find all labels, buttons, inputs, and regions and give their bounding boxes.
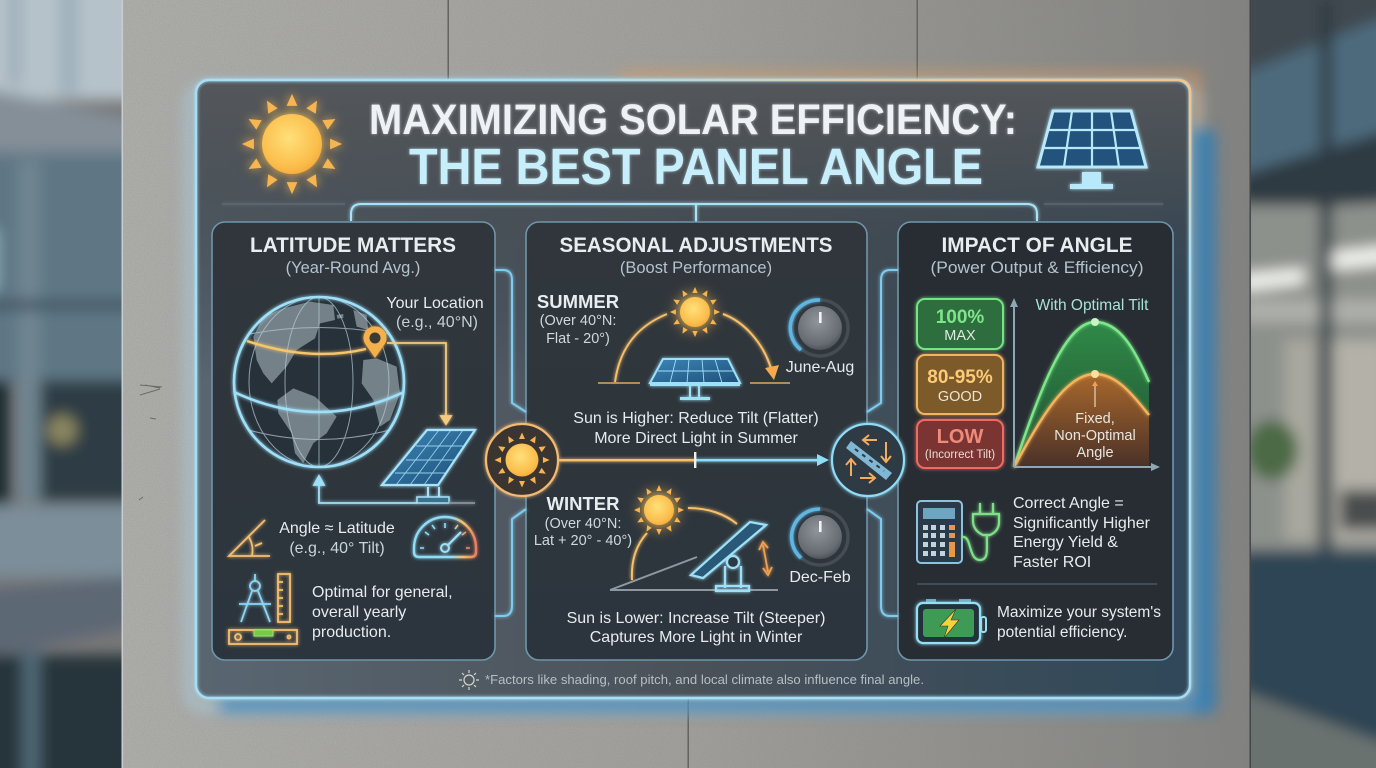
- label: fixed non-optimal angle: Angle: [1076, 445, 1114, 461]
- panel: latitude matters: [212, 222, 495, 660]
- footer note: *Factors like shading, roof pitch, and local climate also influence final angle.: [485, 672, 924, 687]
- text: optimal for general: Optimal for general,: [312, 584, 453, 601]
- connectors: side brackets: [495, 270, 898, 616]
- arrow: ground line back to globe: [314, 476, 475, 503]
- label: fixed non-optimal angle: Fixed,: [1075, 411, 1115, 427]
- icon: sun medallion: [486, 424, 558, 496]
- icon: angle: [229, 520, 270, 556]
- chart: efficiency curves: [1010, 298, 1160, 471]
- panel: seasonal adjustments: [526, 222, 867, 660]
- badge: 100% max: 100%: [936, 307, 984, 328]
- text: optimal for general: production.: [312, 624, 391, 641]
- diagram: winter sun path and tilted panel: [610, 485, 778, 591]
- title: THE BEST PANEL ANGLE: [409, 138, 983, 195]
- subheading: year-round: (Year-Round Avg.): [286, 259, 420, 277]
- icon: tilted solar panel: [382, 430, 475, 503]
- text: correct angle: [1013, 495, 1151, 571]
- text: winter explanation: Sun is Lower: Increase Tilt (Steeper): [567, 610, 825, 627]
- text: correct angle: Correct Angle =: [1013, 495, 1124, 512]
- label: summer: Flat - 20°): [546, 331, 610, 347]
- text: maximize: potential efficiency.: [997, 624, 1127, 641]
- badge: 100% max: MAX: [944, 328, 976, 344]
- icon: plug: [962, 503, 999, 560]
- label: winter: WINTER: [547, 493, 619, 514]
- title: MAXIMIZING SOLAR EFFICIENCY:: [369, 96, 1017, 144]
- text: correct angle: Energy Yield &: [1013, 534, 1118, 551]
- icon: calculator: [917, 501, 962, 563]
- label: fixed non-optimal angle: [1054, 411, 1136, 461]
- icon: compass, ruler, level: [229, 574, 297, 644]
- text: angle equals latitude: Angle ≈ Latitude: [279, 520, 395, 537]
- text: optimal for general: [312, 584, 453, 641]
- text: winter explanation: Captures More Light in Winter: [590, 629, 803, 646]
- label: winter: Lat + 20° - 40°): [534, 533, 632, 549]
- label: your location: [386, 295, 484, 331]
- text: optimal for general: overall yearly: [312, 604, 406, 621]
- background: blurred office left: [0, 0, 122, 768]
- badge: 80-95% good: GOOD: [938, 389, 982, 405]
- label: dec-feb: Dec-Feb: [789, 569, 851, 586]
- badge: low: (Incorrect Tilt): [925, 449, 995, 461]
- label: summer: [537, 291, 619, 347]
- icon: dec-feb dial: [792, 509, 848, 565]
- badge: low: [917, 420, 1003, 468]
- label: winter: [534, 493, 632, 549]
- label: your location: (e.g., 40°N): [396, 314, 478, 331]
- subheading: power output: (Power Output & Efficiency): [930, 259, 1144, 277]
- top connector: [222, 204, 1163, 222]
- subheading: boost performance: (Boost Performance): [620, 259, 772, 277]
- text: maximize: Maximize your system's: [997, 604, 1161, 621]
- text: summer explanation: Sun is Higher: Reduce Tilt (Flatter): [573, 410, 819, 427]
- arrow: location to panel: [387, 343, 451, 424]
- text: correct angle: Significantly Higher: [1013, 515, 1151, 532]
- icon: globe: [234, 297, 404, 467]
- text: summer explanation: More Direct Light in Summer: [594, 430, 798, 447]
- text: winter explanation: [567, 610, 825, 646]
- text: angle equals latitude: (e.g., 40° Tilt): [289, 540, 385, 557]
- icon: location pin: [364, 326, 386, 358]
- panel: impact of angle: [898, 222, 1173, 660]
- heading: latitude matters: LATITUDE MATTERS: [250, 234, 456, 257]
- heading: seasonal adjustments: SEASONAL ADJUSTMENTS: [560, 234, 832, 257]
- label: june-aug: June-Aug: [786, 359, 854, 376]
- title: [369, 96, 1017, 195]
- diagram: summer sun path: [598, 287, 790, 400]
- icon: header solar panel: [1038, 111, 1146, 189]
- label: with optimal tilt: With Optimal Tilt: [1036, 297, 1149, 314]
- label: winter: (Over 40°N:: [545, 516, 621, 532]
- icon: gauge: [414, 517, 476, 557]
- heading: impact of angle: IMPACT OF ANGLE: [942, 234, 1132, 257]
- badge: 100% max: [917, 299, 1003, 349]
- text: angle equals latitude: [279, 520, 395, 557]
- main board: [196, 80, 1190, 698]
- text: correct angle: Faster ROI: [1013, 554, 1091, 571]
- icon: header sun: [242, 94, 342, 194]
- text: summer explanation: [573, 410, 819, 447]
- label: summer: SUMMER: [537, 291, 619, 312]
- text: maximize: [997, 604, 1161, 641]
- background: blurred office right: [1240, 0, 1376, 768]
- icon: tilt adjust medallion: [832, 424, 904, 496]
- badge: 80-95% good: [917, 355, 1003, 414]
- badge: low: LOW: [937, 426, 983, 448]
- arrow: sun to adjust line: [558, 452, 829, 468]
- badge: 80-95% good: 80-95%: [927, 367, 993, 388]
- label: fixed non-optimal angle: Non-Optimal: [1054, 428, 1136, 444]
- wall glow behind board: [190, 76, 1216, 712]
- icon: june-aug dial: [790, 300, 848, 356]
- label: summer: (Over 40°N:: [540, 313, 616, 329]
- icon: battery: [917, 599, 986, 643]
- label: your location: Your Location: [386, 295, 484, 312]
